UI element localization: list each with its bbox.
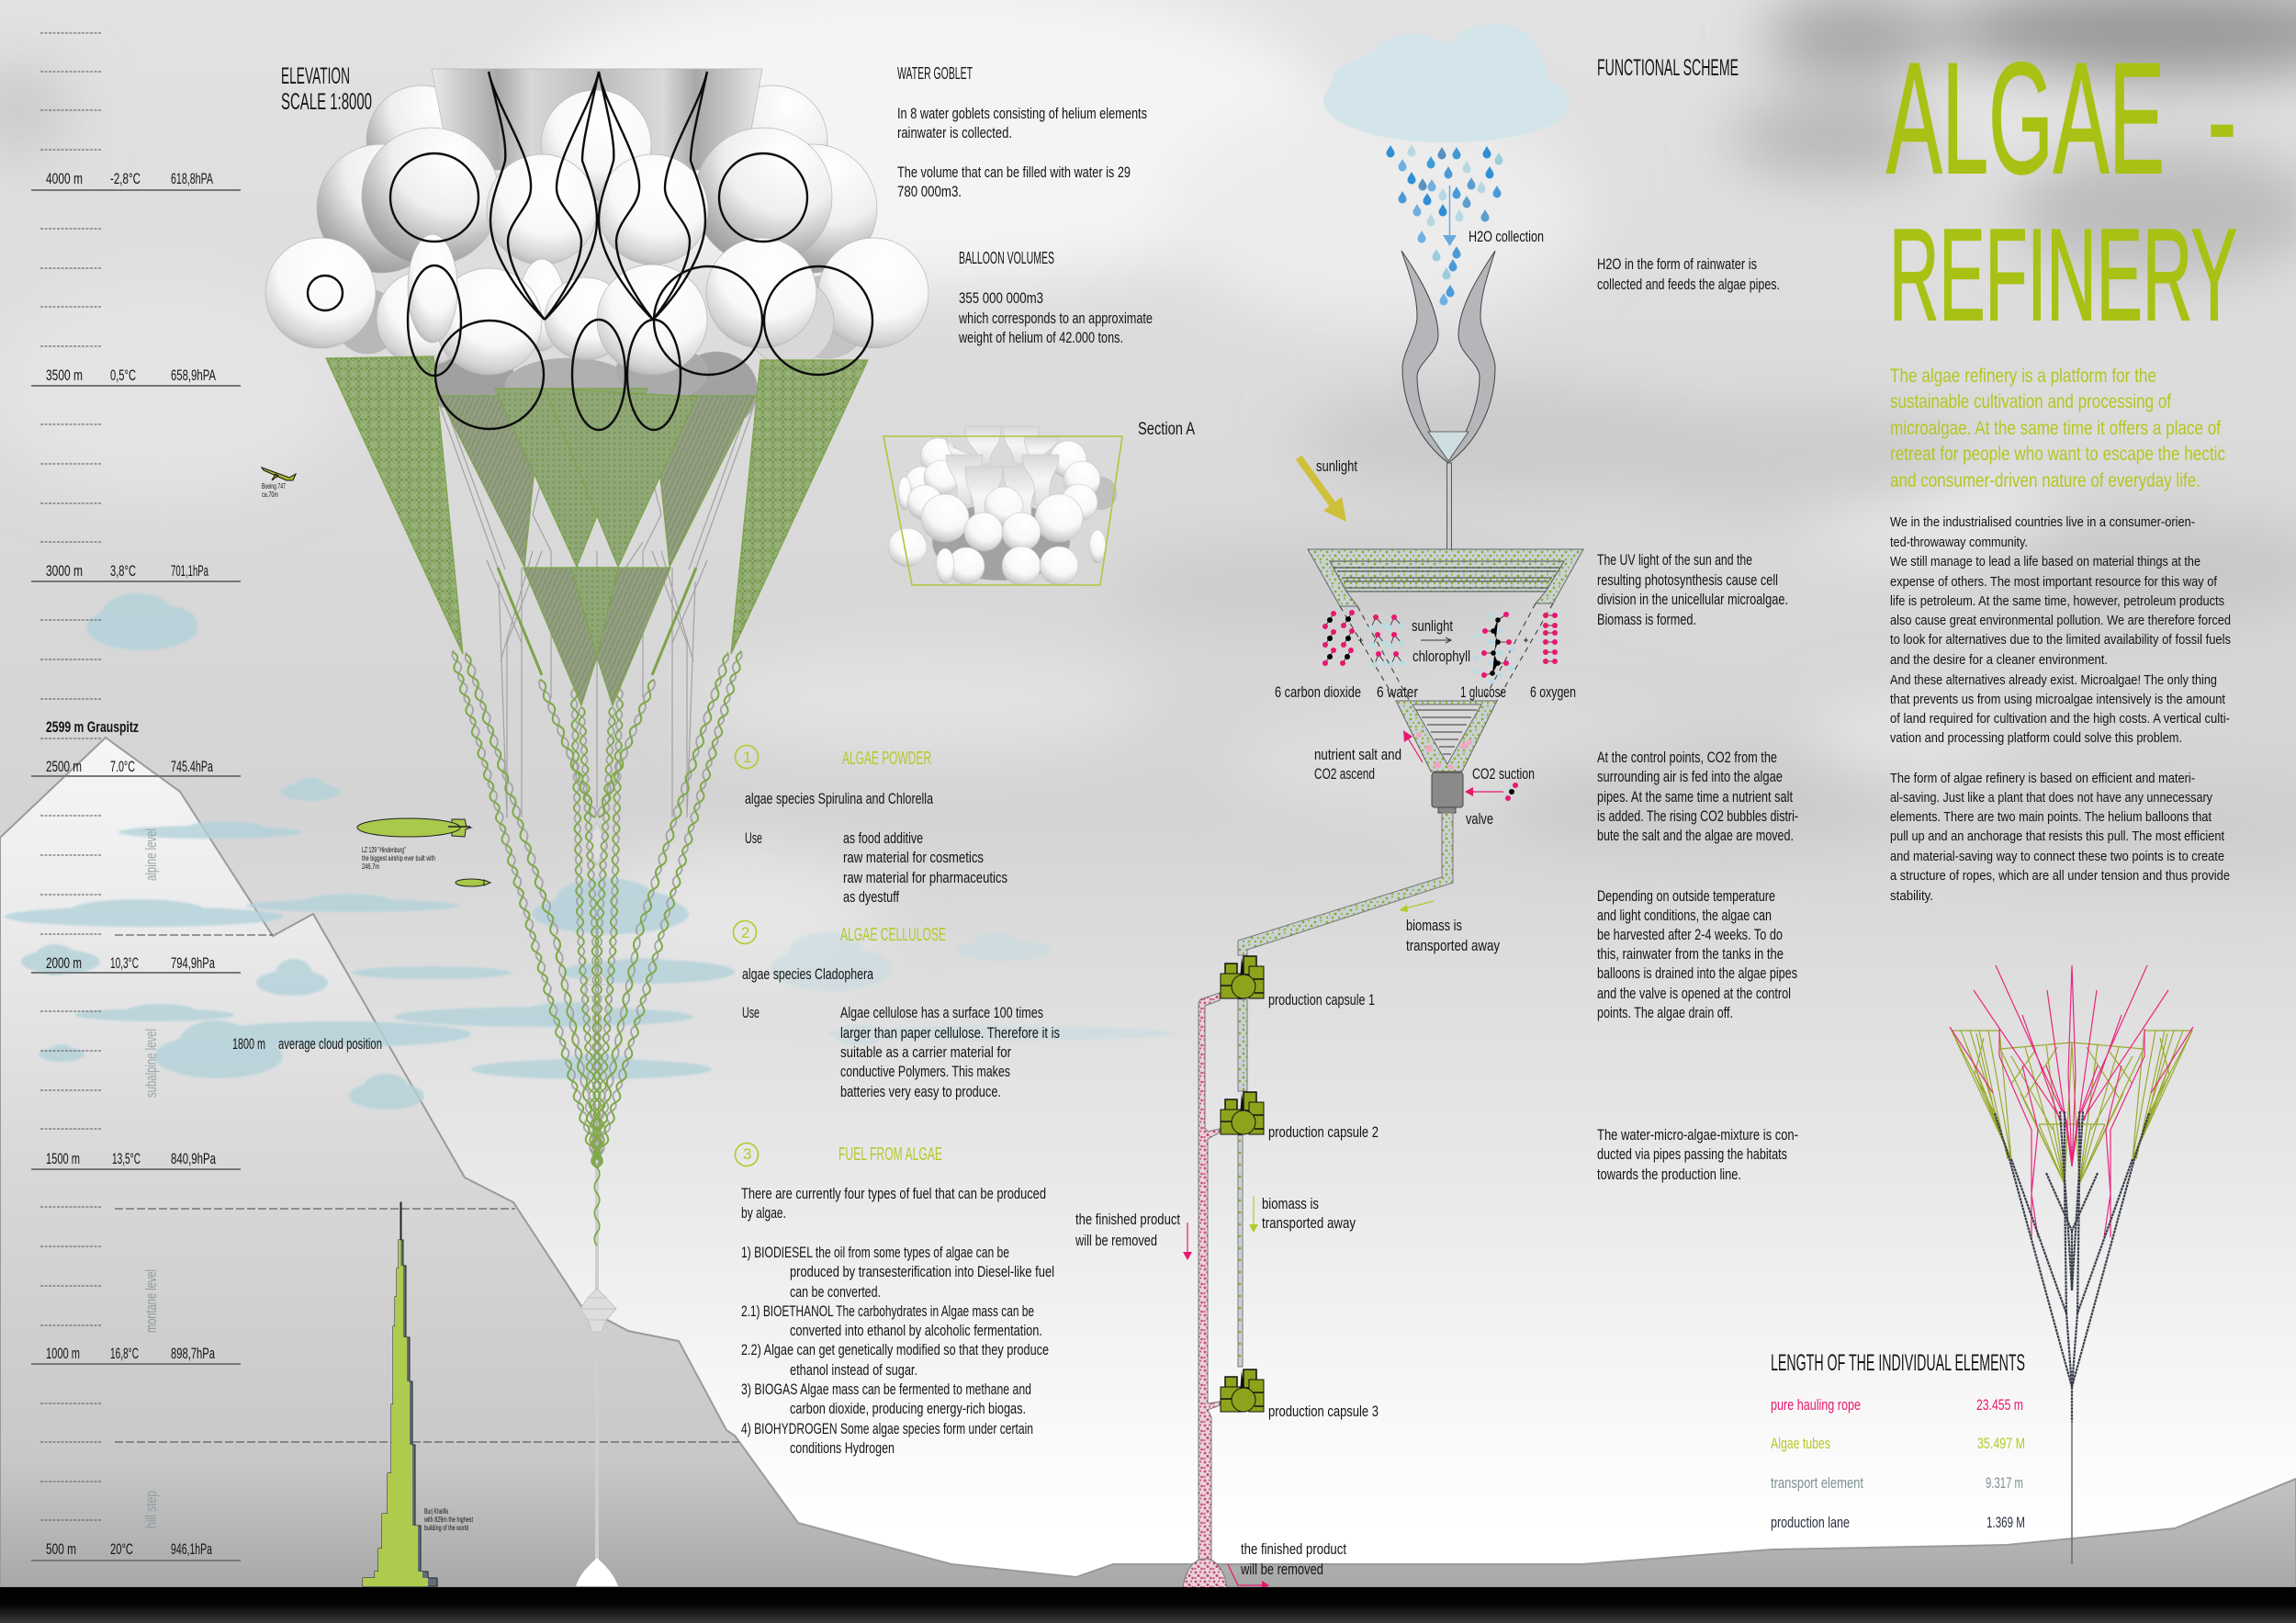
title	[1886, 30, 2237, 348]
algae tank: upper triangle	[1308, 549, 1583, 704]
body text	[1890, 514, 2231, 904]
intro text: retreat for people who want to escape the hectic	[1890, 444, 2225, 465]
arrow: biomass transported downward: biomass is	[1262, 1195, 1319, 1212]
algae pipe	[1238, 813, 1453, 1367]
panel: algae cellulose: 2	[741, 924, 749, 941]
molecule labels: 6 water	[1377, 683, 1418, 701]
molecule labels: 6 oxygen	[1530, 683, 1576, 701]
text: balloon volumes: BALLOON VOLUMES	[959, 249, 1054, 267]
arrow: finished product removed: the finished product	[1075, 1211, 1180, 1228]
panel: fuel from algae: carbon dioxide, producing energy-rich biogas.	[790, 1400, 1026, 1417]
text: control points: surrounding air is fed into the algae	[1597, 768, 1783, 785]
molecule labels: chlorophyll	[1412, 648, 1470, 665]
arrow: finished product at base: will be removed	[1240, 1561, 1323, 1578]
icon: Boeing 747: ca.70m	[262, 490, 278, 499]
panel: algae cellulose	[733, 920, 1060, 1100]
altitude scale: 16,8°C	[110, 1345, 139, 1362]
text: UV photosynthesis: Biomass is formed.	[1597, 611, 1696, 628]
thin grey hauling ropes	[439, 403, 755, 817]
body text: ted-throwaway community.	[1890, 535, 2028, 550]
legend: length of individual elements: 35.497 M	[1977, 1435, 2025, 1452]
algae tube ropes	[450, 649, 744, 1245]
cloud position label: average cloud position	[278, 1035, 382, 1053]
arrow: nutrient salt ascend	[1314, 730, 1423, 783]
arrow: finished product at base	[1228, 1540, 1346, 1590]
anchor pipe	[595, 1167, 599, 1561]
title: -	[2207, 30, 2237, 207]
icon: Burj Khalifa comparison	[363, 1202, 474, 1586]
altitude scale: 658,9hPA	[171, 366, 216, 384]
arrow: H2O collection: H2O collection	[1469, 228, 1544, 245]
molecule labels	[1275, 617, 1576, 701]
panel: algae powder: as food additive	[843, 829, 923, 847]
arrow: biomass transported on diagonal	[1399, 901, 1500, 954]
icon: Hindenburg airship	[357, 818, 471, 871]
arrow: sunlight: sunlight	[1316, 457, 1357, 475]
text: UV photosynthesis: division in the unicellular microalgae.	[1597, 591, 1788, 608]
panel: fuel from algae: FUEL FROM ALGAE	[838, 1144, 942, 1165]
arrow: sunlight	[1299, 457, 1357, 522]
text: water goblet: In 8 water goblets consisting of helium elements	[897, 105, 1147, 122]
goblet section outlines and circles	[308, 72, 872, 430]
panel: fuel from algae: 4) BIOHYDROGEN Some algae species form under certain	[741, 1420, 1033, 1437]
panel: algae cellulose: Algae cellulose has a surface 100 times	[840, 1004, 1043, 1021]
molecule labels: sunlight	[1412, 617, 1453, 635]
finished product pipe	[1183, 993, 1227, 1589]
icon: Hindenburg airship: 246,7m	[362, 862, 379, 871]
text: water-micro-algae mixture: ducted via pipes passing the habitats	[1597, 1145, 1787, 1163]
net: outer left	[326, 356, 463, 654]
dark transport rope lines	[1995, 1111, 2149, 1422]
text: harvesting: Depending on outside temperature	[1597, 887, 1775, 905]
body text: The form of algae refinery is based on efficient and materi-	[1890, 771, 2195, 786]
body text: We still manage to lead a life based on material things at the	[1890, 554, 2200, 569]
body text: stability.	[1890, 888, 1933, 904]
vertical vegetation level labels: subalpine level	[142, 1029, 160, 1098]
panel: algae powder	[735, 746, 1007, 906]
panel: fuel from algae: 1) BIODIESEL the oil from some types of algae can be	[741, 1244, 1009, 1261]
arrow: finished product removed: will be removed	[1075, 1232, 1157, 1249]
text: UV photosynthesis: resulting photosynthesis cause cell	[1597, 571, 1778, 589]
text: harvesting: balloons is drained into the algae pipes	[1597, 964, 1797, 982]
text: water goblet: The volume that can be filled with water is 29	[897, 163, 1131, 181]
panel: algae powder: Use	[745, 829, 762, 847]
text: control points: pipes. At the same time a nutrient salt	[1597, 788, 1793, 806]
altitude scale: 4000 m	[46, 170, 83, 187]
molecule labels: 6 carbon dioxide	[1275, 683, 1361, 701]
net: inner right	[652, 396, 755, 567]
icon: Hindenburg airship: the biggest airship ever built with	[362, 854, 435, 862]
arrow: nutrient salt ascend: CO2 ascend	[1314, 765, 1375, 783]
arrow: H2O collection	[1443, 186, 1544, 246]
anchor dome	[576, 1558, 618, 1586]
pink hauling rope lines	[1950, 965, 2193, 1237]
vertical vegetation level labels	[142, 828, 160, 1528]
body text: pull up and an anchorage that resists this pull. The most efficient	[1890, 828, 2225, 844]
text: water-micro-algae mixture	[1597, 1126, 1798, 1183]
photosynthesis molecules	[1322, 610, 1558, 684]
legend: length of individual elements: LENGTH OF THE INDIVIDUAL ELEMENTS	[1771, 1350, 2025, 1376]
altitude scale: 745.4hPa	[171, 758, 213, 775]
panel: fuel from algae: 2.1) BIOETHANOL The carbohydrates in Algae mass can be	[741, 1302, 1034, 1320]
icon: rain drops	[1387, 144, 1503, 305]
icon: small airship	[456, 879, 490, 886]
net: outer right	[731, 360, 868, 654]
body text: al-saving. Just like a plant that does not have any unnecessary	[1890, 790, 2212, 806]
vertical vegetation level labels: hill step	[142, 1491, 160, 1528]
text: H2O feed: H2O in the form of rainwater is	[1597, 255, 1757, 273]
text: harvesting: and the valve is opened at the control	[1597, 985, 1791, 1002]
altitude scale: 840,9hPa	[171, 1150, 216, 1167]
elevation dashed reference lines	[115, 935, 739, 1442]
altitude scale: 2000 m	[46, 954, 82, 972]
panel: fuel from algae: by algae.	[741, 1204, 786, 1222]
legend: length of individual elements: Algae tubes	[1771, 1435, 1830, 1452]
intro text: microalgae. At the same time it offers a place of	[1890, 418, 2221, 439]
legend: length of individual elements: transport element	[1771, 1474, 1863, 1492]
icon: production capsule 2: production capsule 2	[1268, 1123, 1379, 1141]
legend: length of individual elements	[1771, 1350, 2025, 1531]
legend: length of individual elements: 9.317 m	[1986, 1474, 2023, 1492]
panel: fuel from algae: converted into ethanol by alcoholic fermentation.	[790, 1322, 1042, 1339]
panel: fuel from algae: ethanol instead of sugar.	[790, 1361, 917, 1379]
body text: also cause great environmental pollution. We are therefore forced	[1890, 613, 2231, 628]
icon: valve	[1432, 772, 1493, 828]
panel: algae powder: as dyestuff	[843, 888, 899, 906]
panel: algae cellulose: larger than paper cellulose. Therefore it is	[840, 1024, 1060, 1042]
altitude scale: 701,1hPa	[171, 562, 208, 580]
text: UV photosynthesis	[1597, 551, 1788, 628]
altitude scale: 794,9hPa	[171, 954, 215, 972]
text: water goblet	[897, 64, 1147, 200]
intro text: The algae refinery is a platform for the	[1890, 366, 2156, 387]
text: balloon volumes	[958, 249, 1153, 346]
heading: elevation scale: ELEVATION	[281, 63, 350, 89]
body text: And these alternatives already exist. Microalgae! The only thing	[1890, 672, 2217, 688]
net: lower centre band	[571, 568, 618, 657]
panel: algae cellulose: Use	[742, 1004, 760, 1021]
balloon cluster	[265, 69, 929, 429]
text: harvesting: be harvested after 2-4 weeks. To do	[1597, 926, 1783, 943]
altitude scale: 618,8hPA	[171, 170, 213, 187]
heading: elevation scale	[281, 63, 372, 115]
legend: length of individual elements: 1.369 M	[1986, 1514, 2025, 1531]
body text: and material-saving way to connect these two points is to create	[1890, 849, 2224, 864]
algae net triangles	[326, 356, 868, 705]
altitude scale: 2500 m	[46, 758, 82, 775]
icon: Burj Khalifa comparison: with 829m the highest	[423, 1516, 474, 1524]
icon: production capsule 3	[1221, 1369, 1379, 1420]
cloud position label: 1800 m	[232, 1035, 265, 1053]
panel: algae powder: algae species Spirulina and Chlorella	[745, 790, 933, 807]
arrow: finished product at base: the finished product	[1241, 1540, 1346, 1558]
panel: algae cellulose: batteries very easy to produce.	[840, 1083, 1001, 1100]
altitude scale: 3,8°C	[110, 562, 136, 580]
altitude scale: 500 m	[46, 1540, 76, 1558]
body text: expense of others. The most important resource for this way of	[1890, 574, 2218, 590]
text: water-micro-algae mixture: The water-micro-algae-mixture is con-	[1597, 1126, 1798, 1144]
arrow: CO2 suction: CO2 suction	[1472, 765, 1535, 783]
clouds: elevation background	[5, 593, 735, 1110]
panel: fuel from algae: produced by transesterification into Diesel-like fuel	[790, 1263, 1054, 1280]
transport capsules	[580, 822, 616, 1332]
arrow: biomass transported on diagonal: transported away	[1406, 937, 1500, 954]
text: balloon volumes: weight of helium of 42.000 tons.	[958, 329, 1123, 346]
body text: of land required for cultivation and the high costs. A vertical culti-	[1890, 711, 2230, 727]
panel: algae cellulose: ALGAE CELLULOSE	[840, 925, 946, 945]
vertical vegetation level labels: alpine level	[142, 828, 160, 881]
net: central left	[495, 389, 647, 567]
icon: Boeing 747	[262, 468, 296, 499]
black footer bar	[0, 1587, 2296, 1623]
body text: a structure of ropes, which are all under tension and thus provide	[1890, 868, 2230, 884]
text: control points: At the control points, CO2 from the	[1597, 749, 1777, 766]
thick algae tubes leading to lower net	[498, 568, 696, 675]
altitude scale: 7.0°C	[110, 758, 135, 775]
water goblet outer shell	[432, 69, 762, 170]
body text: vation and processing platform could solve this problem.	[1890, 730, 2182, 746]
intro text	[1890, 366, 2225, 491]
arrow: finished product removed	[1075, 1211, 1192, 1260]
body text: that prevents us from using microalgae intensively is the amount	[1890, 692, 2226, 707]
legend: length of individual elements: production lane	[1771, 1514, 1850, 1531]
olive algae net lines	[1952, 1031, 2192, 1184]
panel: algae powder: raw material for pharmaceutics	[843, 869, 1007, 886]
icon: production capsule 3: production capsule 3	[1268, 1403, 1379, 1420]
text: water-micro-algae mixture: towards the production line.	[1597, 1166, 1741, 1183]
molecule labels: 1 glucose	[1460, 683, 1506, 701]
text: control points: is added. The rising CO2 bubbles distri-	[1597, 807, 1798, 825]
panel: algae cellulose: conductive Polymers. This makes	[840, 1063, 1010, 1080]
icon: production capsule 1	[1221, 956, 1375, 1009]
text: harvesting	[1597, 887, 1797, 1021]
altitude scale: 13,5°C	[112, 1150, 141, 1167]
icon: water goblet	[1401, 251, 1495, 549]
icon: rain cloud	[1323, 24, 1570, 142]
icon: Burj Khalifa comparison: building of the world	[424, 1524, 468, 1532]
altitude scale: 20°C	[110, 1540, 133, 1558]
panel: fuel from algae: 3	[743, 1145, 751, 1163]
text: water goblet: 780 000m3.	[897, 183, 962, 200]
panel: fuel from algae: 3) BIOGAS Algae mass can be fermented to methane and	[741, 1381, 1031, 1398]
net: inner left	[439, 396, 542, 567]
icon: production capsule 2	[1221, 1092, 1379, 1141]
altitude scale	[31, 33, 241, 1561]
body text: to look for alternatives due to the limited availability of fossil fuels	[1890, 632, 2231, 648]
icon: production capsule 1: production capsule 1	[1268, 991, 1375, 1009]
arrow: biomass transported on diagonal: biomass is	[1406, 917, 1462, 934]
panel: algae cellulose: suitable as a carrier material for	[840, 1043, 1011, 1061]
panel: fuel from algae: There are currently four types of fuel that can be produced	[741, 1185, 1046, 1202]
panel: fuel from algae: can be converted.	[790, 1283, 881, 1301]
arrow: biomass transported downward	[1249, 1195, 1356, 1233]
body text: and the desire for a cleaner environment.	[1890, 652, 2108, 668]
altitude scale: 3000 m	[46, 562, 83, 580]
panel: fuel from algae: 2.2) Algae can get genetically modified so that they produce	[741, 1341, 1049, 1358]
icon: Boeing 747: Boeing 747	[262, 482, 286, 490]
structure diagram	[1950, 965, 2193, 1564]
altitude scale: 946,1hPa	[171, 1540, 212, 1558]
section A drawing	[884, 420, 1195, 585]
body text: life is petroleum. At the same time, however, petroleum products	[1890, 593, 2224, 609]
text: balloon volumes: which corresponds to an approximate	[958, 310, 1153, 327]
icon: valve: valve	[1466, 810, 1493, 828]
text: water goblet: WATER GOBLET	[897, 64, 973, 83]
heading: functional scheme: FUNCTIONAL SCHEME	[1597, 55, 1739, 81]
panel: algae powder: 1	[743, 749, 751, 766]
altitude scale: 2599 m Grauspitz	[46, 718, 139, 736]
altitude scale: 1500 m	[46, 1150, 80, 1167]
altitude scale: 898,7hPa	[171, 1345, 215, 1362]
text: control points: bute the salt and the algae are moved.	[1597, 827, 1794, 844]
body text: elements. There are two main points. The helium balloons that	[1890, 809, 2212, 825]
legend: length of individual elements: 23.455 m	[1976, 1396, 2023, 1414]
arrow: nutrient salt ascend: nutrient salt and	[1314, 746, 1401, 763]
panel: fuel from algae: conditions Hydrogen	[790, 1439, 895, 1457]
text: UV photosynthesis: The UV light of the sun and the	[1597, 551, 1752, 569]
intro text: and consumer-driven nature of everyday life.	[1890, 470, 2200, 491]
altitude scale: 3500 m	[46, 366, 83, 384]
vertical vegetation level labels: montane level	[142, 1269, 160, 1333]
panel: algae powder: raw material for cosmetics	[843, 849, 984, 866]
altitude scale: -2,8°C	[110, 170, 141, 187]
panel: algae cellulose: algae species Cladophera	[742, 965, 873, 983]
panel: fuel from algae	[735, 1143, 1054, 1457]
body text: We in the industrialised countries live in a consumer-orien-	[1890, 514, 2195, 530]
text: harvesting: this, rainwater from the tanks in the	[1597, 945, 1784, 963]
text: harvesting: points. The algae drain off.	[1597, 1004, 1733, 1021]
altitude scale: 0,5°C	[110, 366, 136, 384]
intro text: sustainable cultivation and processing of	[1890, 391, 2171, 412]
arrow: CO2 suction	[1465, 765, 1535, 801]
mountain range	[0, 738, 2296, 1587]
algae tank: lower triangle	[1396, 701, 1497, 772]
text: H2O feed: collected and feeds the algae pipes.	[1597, 276, 1780, 293]
arrow: biomass transported downward: transported away	[1262, 1214, 1356, 1232]
legend: length of individual elements: pure hauling rope	[1771, 1396, 1861, 1414]
panel: algae powder: ALGAE POWDER	[842, 749, 931, 769]
section A drawing: Section A	[1138, 420, 1195, 439]
text: control points	[1597, 749, 1798, 844]
clouds: pale behind product text	[771, 932, 1176, 1046]
cloud position label	[232, 1035, 382, 1053]
icon: Hindenburg airship: LZ 129 "Hindenburg"	[362, 846, 406, 854]
text: harvesting: and light conditions, the algae can	[1597, 907, 1772, 924]
altitude scale: 10,3°C	[110, 954, 139, 972]
heading: elevation scale: SCALE 1:8000	[281, 89, 372, 115]
text: balloon volumes: 355 000 000m3	[959, 289, 1043, 307]
icon: Burj Khalifa comparison: Burj Khalifa	[424, 1507, 448, 1516]
text: water goblet: rainwater is collected.	[897, 124, 1012, 141]
net: lower central	[523, 568, 670, 705]
text: H2O feed	[1597, 255, 1780, 293]
altitude scale: 1000 m	[46, 1345, 80, 1362]
net: central right	[545, 389, 697, 567]
